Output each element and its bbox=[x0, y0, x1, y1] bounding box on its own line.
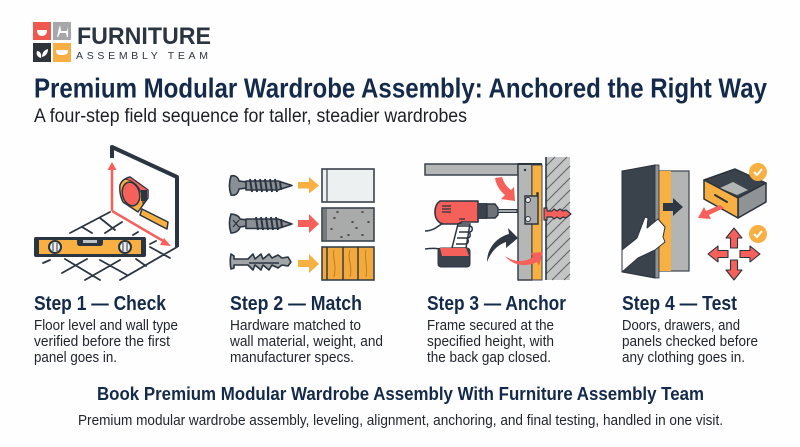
logo: Furniture Assembly Team: FURNITURE bbox=[77, 23, 211, 50]
step 2 text: Hardware matched to bbox=[230, 318, 361, 334]
step 4 text: Step 4 — Test bbox=[622, 292, 737, 315]
step 3 text bbox=[427, 292, 566, 366]
screw 1 bbox=[230, 176, 292, 195]
call to action heading: Book Premium Modular Wardrobe Assembly With Furniture Assembly Team bbox=[97, 384, 704, 404]
step 3 text: the back gap closed. bbox=[427, 350, 551, 366]
step 2 text bbox=[229, 292, 383, 366]
step 1 text: Step 1 — Check bbox=[34, 292, 166, 315]
bracket bbox=[525, 193, 538, 224]
step 4 text: Doors, drawers, and bbox=[622, 318, 740, 334]
subtitle: A four-step field sequence for taller, steadier wardrobes bbox=[34, 106, 467, 127]
screw 2 bbox=[230, 214, 292, 233]
check badge 2 bbox=[749, 225, 767, 243]
step 1 text bbox=[34, 292, 178, 366]
drill bbox=[435, 201, 478, 224]
step 4 text: any clothing goes in. bbox=[622, 350, 745, 366]
wall plug bbox=[230, 254, 291, 270]
call to action description: Premium modular wardrobe assembly, leveling, alignment, anchoring, and final testing, handled in one visit. bbox=[78, 413, 723, 429]
step 2 text: Step 2 — Match bbox=[230, 292, 362, 315]
icon: drill anchoring frame to wall bbox=[425, 157, 571, 280]
check badge 1 bbox=[749, 163, 767, 181]
hand bbox=[622, 217, 665, 272]
step 1 text: panel goes in. bbox=[34, 350, 117, 366]
logo: Furniture Assembly Team bbox=[33, 22, 211, 62]
step 1 text: verified before the first bbox=[34, 334, 170, 350]
step 1 text: Floor level and wall type bbox=[34, 318, 178, 334]
icon: door, drawer and movement checks bbox=[622, 163, 767, 280]
icon: floor, wall, tape measure and level bbox=[34, 147, 177, 280]
step 4 text bbox=[622, 292, 758, 366]
step 3 text: specified height, with bbox=[427, 334, 554, 350]
icon: screws, arrows and wall materials bbox=[230, 169, 374, 280]
step 2 text: manufacturer specs. bbox=[230, 350, 354, 366]
step 4 text: panels checked before bbox=[622, 334, 758, 350]
movement arrows bbox=[708, 228, 760, 280]
step 3 text: Frame secured at the bbox=[427, 318, 554, 334]
wall anchor bbox=[544, 208, 571, 220]
logo: Furniture Assembly Team: ASSEMBLY TEAM bbox=[76, 50, 208, 62]
drawer bbox=[704, 169, 766, 218]
step 3 text: Step 3 — Anchor bbox=[427, 292, 566, 315]
arrows bbox=[495, 177, 515, 201]
step 2 text: wall material, weight, and bbox=[229, 334, 383, 350]
